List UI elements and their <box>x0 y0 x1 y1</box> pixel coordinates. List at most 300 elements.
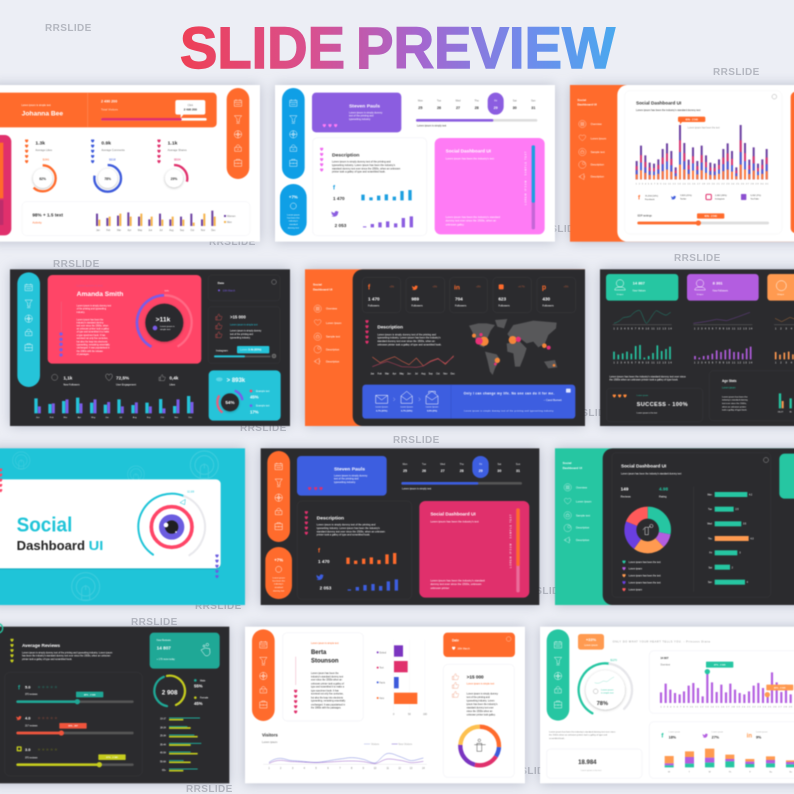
side menu: Dashboard UI <box>563 466 582 470</box>
horizontal bars: 4.3 <box>750 538 754 540</box>
rating row 3.0: 3.0 <box>25 747 31 752</box>
social stat cards: 1 470 <box>368 296 380 301</box>
profile card: typesetting industry <box>349 118 371 121</box>
instagram card: typesetting industry. <box>230 336 251 339</box>
growth pill: has been the <box>287 216 300 219</box>
horizontal bars: Mon <box>707 494 713 496</box>
header banner: 2 490 200 <box>184 107 197 111</box>
activity bar chart card: Dec <box>211 230 216 232</box>
profile card: survived not only five centuries, <box>311 693 344 696</box>
line chart: Nov <box>443 374 448 376</box>
slide 12: overview light <box>540 627 794 783</box>
bar charts: 1 2 3 4 <box>775 363 794 365</box>
growth badge <box>578 634 604 650</box>
stacked social card: Lorem ipsum <box>756 730 768 733</box>
calendar: 29 <box>494 106 498 110</box>
side menu <box>577 98 607 180</box>
calendar: Mon <box>418 100 423 103</box>
watermarks: RRSLIDE <box>53 259 100 270</box>
stat: shares: Average Shares <box>168 148 187 152</box>
likes card: typesetting industry. Lorem <box>467 700 495 703</box>
stat row: New Followers <box>63 383 80 386</box>
side menu: Overview <box>326 307 337 311</box>
success card: SUCCESS - 100% <box>637 402 688 408</box>
social stat cards: 430 <box>542 296 551 301</box>
visitors line chart: 7 <box>339 768 341 770</box>
description card: printer took a galley of type and scrambled book. <box>317 534 371 537</box>
profile card: Lorem ipsum is <box>160 325 175 328</box>
gauge: is simple text <box>601 692 614 695</box>
total card <box>547 749 642 778</box>
profile card: Stounson <box>311 658 339 664</box>
heading <box>10 639 112 663</box>
profile card: text of the printing and <box>334 478 359 481</box>
quote band: Only I can change my life. No one can do it for me. <box>464 391 554 395</box>
header banner: Johanna Bee <box>22 111 63 118</box>
slide 5: social map dark <box>305 269 585 426</box>
monthly bar chart: Mar <box>63 416 67 419</box>
horizontal bar chart: 0 <box>393 714 395 716</box>
slider: GDP rankings <box>637 214 653 217</box>
profile card: Amanda Smith <box>77 291 123 298</box>
stacked social card: T <box>689 772 691 774</box>
instagram card: Instagram <box>216 349 229 353</box>
likes card <box>443 664 514 777</box>
line charts: 1 2 3 4 5 6 7 8 9 10 11 12 13 14 <box>694 328 753 330</box>
profile card: ever since the 1500s when an <box>311 679 343 682</box>
visitors line chart: Visitors <box>371 743 380 746</box>
header banner: Lorem ipsum is simple text <box>21 104 51 107</box>
stacked social card: Su <box>789 772 793 774</box>
side menu <box>313 283 342 364</box>
chart card: 1 2 3 4 5 6 7 8 9 10 11 12 13 14 15 16 17 18 19 20 21 22 23 24 25 26 27 28 29 30 31 <box>636 183 769 185</box>
calendar: 31 <box>516 469 520 473</box>
heading: Lorem ipsum is simply dummy text of the printing and typesetting industry. Lorem ipsum <box>22 652 112 655</box>
horizontal bar chart: Auto <box>379 697 385 700</box>
description card: typesetting industry. Lorem ipsum has been the industry's <box>332 164 396 167</box>
donut legend: Lorem ipsum has been the text <box>629 575 661 578</box>
age stats card: 18-27 <box>778 412 784 414</box>
side menu: Description <box>576 526 590 530</box>
monthly bar chart: Apr <box>78 416 81 419</box>
stat: shares: 1.1k <box>168 140 178 146</box>
quote band: Lorem ipsum is simple dummy text of the printing and typesetting industry <box>464 410 554 413</box>
cyan stat card <box>209 370 281 421</box>
bar charts <box>613 345 794 365</box>
age stats card: Lorem ipsum <box>722 386 736 389</box>
stacked social card: 18% <box>669 736 677 740</box>
growth pill: dummy text <box>288 226 299 229</box>
rating row 4.0: 4.0 <box>25 716 31 721</box>
activity bar chart card: Oct <box>191 229 194 232</box>
side menu: Description <box>591 163 604 167</box>
chart card: Social Dashboard UI <box>636 100 681 105</box>
cyan stat card: > 893k <box>227 378 246 384</box>
age stats card: took a galley of type book. <box>722 409 747 412</box>
stat card purple <box>687 274 759 301</box>
social stat cards: +5% <box>389 287 394 289</box>
calendar: Fri <box>479 463 483 466</box>
age stats card: when an unknown printer <box>722 405 746 408</box>
side menu: Lorem Ipsum <box>576 500 592 504</box>
description card: Description <box>317 515 344 521</box>
profile card: text ever since the 1500s, when <box>77 324 109 327</box>
right green card <box>779 454 794 499</box>
visitors line chart: Visitors <box>262 732 278 737</box>
cyan stat card: 45% <box>250 395 259 400</box>
watermarks: RRSLIDE <box>209 237 256 248</box>
gender donut: 2 908 <box>162 689 178 696</box>
chart card: 7,823 (21%) <box>680 195 692 197</box>
watermarks: RRSLIDE <box>505 766 552 777</box>
line chart: Jul <box>415 374 418 376</box>
line chart: Feb <box>378 374 382 376</box>
description <box>365 320 442 346</box>
total card: 18.984 <box>578 760 597 766</box>
likes card: text of the printing and <box>467 696 490 699</box>
side menu: Lorem Ipsum <box>591 136 607 140</box>
horizontal bars <box>707 492 754 585</box>
overview bar chart card: 47% - 2 540 <box>714 664 726 667</box>
slide 11: Berta Stounson <box>245 627 525 783</box>
activity bar chart card: May <box>138 230 143 232</box>
slide 9: donut green dark <box>555 448 794 605</box>
social stat cards: 989 <box>411 296 420 301</box>
main card <box>612 453 771 597</box>
profile card: but also the leap into electronic <box>77 340 109 343</box>
description card: f <box>318 548 321 555</box>
age horizontal bars <box>160 718 201 772</box>
horizontal bar chart: Dotted <box>379 651 387 654</box>
horizontal bars: Sat <box>708 566 712 569</box>
side menu: Description <box>576 538 590 542</box>
right card edge <box>791 92 794 233</box>
profile card: text of the printing and <box>349 115 374 118</box>
rating row 3.0 <box>16 746 134 767</box>
donut <box>630 513 665 547</box>
age horizontal bars: 45-54 <box>160 753 167 755</box>
chart card: Facebook <box>645 199 655 201</box>
description card <box>313 138 427 236</box>
gender donut: 55% <box>194 684 203 689</box>
visitors line chart: 2 <box>280 768 282 770</box>
gender donut: 45% <box>194 701 203 706</box>
sidebar <box>227 88 249 179</box>
monthly bar chart: Jul <box>119 417 123 419</box>
quote band: – Carol Burnett <box>544 398 562 402</box>
rating row 5.0: 40% - 2 540 <box>84 693 96 696</box>
gender donut: Male <box>200 679 206 682</box>
horizontal bars: Wed <box>707 524 713 526</box>
stat row: Likes <box>169 383 176 386</box>
quote band: Lorem Ipsum <box>400 406 413 409</box>
header banner: 2 490 200 <box>101 100 117 104</box>
success card: Lorem ipsum <box>637 394 648 397</box>
profile card: typesetting, remaining essentially <box>311 700 346 703</box>
slide 6: visitors dark <box>600 269 794 426</box>
profile card <box>312 93 401 132</box>
pink feature card: Social Dashboard UI <box>446 148 491 153</box>
profile card: type and scrambled it to make a <box>311 686 345 689</box>
slide 1: Johanna Bee <box>0 85 260 242</box>
profile card: of the printing and typesetting <box>77 308 107 311</box>
description card: 1 470 <box>318 559 330 564</box>
quote band: Lorem Ipsum <box>375 406 388 409</box>
likes card: Lorem ipsum is simple text <box>467 683 495 686</box>
social stat cards: Followers <box>411 304 423 308</box>
sidebar <box>547 629 569 721</box>
watermarks: RRSLIDE <box>393 435 440 446</box>
description card: printer took a galley of type and scrambled book. <box>332 171 386 174</box>
body text: Lorem ipsum has been the industry's standard dummy text ever since <box>609 375 686 378</box>
line chart: Apr <box>393 373 396 376</box>
description: Description <box>377 325 403 330</box>
chart card: Instagram <box>715 197 725 200</box>
quote band: 9,9% (9%) <box>427 410 437 412</box>
crimson feature card: LOREM IPSUM - SAMPLE TEXT <box>510 514 513 568</box>
header banner: Total Visitors <box>101 108 118 112</box>
visitors line chart: 10 <box>374 768 377 770</box>
age horizontal bars: 18-24 <box>160 727 167 729</box>
gauge <box>569 654 642 726</box>
age stats card: text ever since the 1500s, <box>722 402 747 405</box>
stacked social card: f <box>661 732 664 739</box>
age stats card: Age Stats <box>722 379 737 383</box>
side menu: Lorem Ipsum <box>326 321 342 325</box>
profile card: industry. <box>77 311 85 314</box>
visitors line chart: 14 <box>422 768 425 770</box>
profile card <box>48 275 201 364</box>
rating row 5.0: 370 reviews <box>25 693 38 696</box>
visitors line chart: 6 <box>327 768 329 770</box>
visitors line chart: 3 <box>292 768 294 770</box>
profile card: simple text <box>160 328 171 331</box>
profile card: of passages. <box>77 354 90 356</box>
side menu: Sample text <box>326 335 340 339</box>
stat: likes: 1.3k <box>35 140 45 146</box>
description card: Lorem ipsum is simply dummy text of the printing and <box>332 161 391 164</box>
donut legend: Lorem ipsum has been the text <box>629 582 661 585</box>
visitors line chart: 11 <box>386 768 390 770</box>
activity bar chart card: Feb <box>106 230 111 232</box>
donut legend: Lorem ipsum has been the text <box>629 561 661 564</box>
eye gauge: 12,100 <box>187 491 195 493</box>
social stat cards: 704 <box>455 296 463 301</box>
slide 8: Steven Pauls dark <box>261 448 539 605</box>
chart card: YouTube <box>750 198 760 200</box>
age horizontal bars: 55-64 <box>160 761 167 763</box>
calendar: Mon <box>403 463 408 466</box>
white title card: Dashboard <box>17 539 85 553</box>
rating row 4.0: 30% - 297 <box>68 726 79 728</box>
stat: likes: $1941 <box>43 159 50 161</box>
main card: 4.98 <box>659 487 668 492</box>
stat: shares: $5334 <box>174 159 181 161</box>
description card: Lorem ipsum is simply dummy text of the printing and <box>317 524 376 527</box>
profile card: the 1960s with the release <box>77 350 104 353</box>
calendar: 30 <box>513 106 517 110</box>
age stats card: industry's standard dummy <box>722 399 749 402</box>
profile card: type specimen book. It has <box>311 689 340 692</box>
line chart: Jan <box>370 374 375 376</box>
chart card: 5,352 (7%) <box>750 195 761 197</box>
watermarks: RRSLIDE <box>535 224 582 235</box>
title: SLIDE <box>180 16 345 81</box>
left pink card <box>0 135 11 235</box>
activity bar chart card: Men <box>227 221 232 224</box>
horizontal bar chart: Text <box>379 667 384 670</box>
stat card purple: New Followers <box>713 289 729 292</box>
profile card: industry's standard dummy <box>77 321 104 324</box>
slide 2: Steven Pauls light <box>275 85 555 242</box>
rating row 5.0: f <box>18 685 21 692</box>
description: Lorem ipsum is simply dummy text of the printing and <box>377 334 437 337</box>
calendar: 28 <box>460 469 464 473</box>
growth badge: +33% <box>586 637 597 642</box>
profile card: unchanged. It was popularised in <box>77 347 110 350</box>
line chart <box>370 356 456 376</box>
description card: Description <box>332 152 359 158</box>
main card: Lorem ipsum has been the industry's standard dummy text <box>621 472 682 475</box>
stacked social card: M <box>668 772 670 774</box>
calendar: Wed <box>455 100 461 103</box>
growth pill <box>280 184 307 236</box>
profile card: Lorem ipsum is simply dummy <box>349 112 383 115</box>
activity bar chart card: Women <box>227 215 236 218</box>
sidebar <box>267 451 290 542</box>
horizontal bar chart: 50 <box>408 714 411 716</box>
stacked social card: F <box>749 772 751 774</box>
instagram card <box>208 307 280 363</box>
chart card <box>625 91 782 234</box>
crimson feature card: unknown printer <box>430 586 449 590</box>
rating row 5.0: ★★★★★ <box>37 684 58 689</box>
horizontal bars: 3.5 <box>743 524 747 526</box>
monthly bar chart: Aug <box>133 416 137 419</box>
pink feature card: unknown galley <box>446 223 465 227</box>
note text: Lorem ipsum has been the industry's standard dummy text ever since <box>549 731 616 734</box>
stacked social card: Th <box>729 772 732 774</box>
overview bar chart card: Overview <box>660 663 670 666</box>
date card <box>208 275 280 301</box>
quote text: ONLY DO WHAT YOUR HEART TELLS YOU. - Princess Diana <box>613 640 711 644</box>
likes card: since the 1500s when an <box>467 710 493 713</box>
age stats card <box>709 371 794 421</box>
side menu: Dashboard UI <box>313 287 333 291</box>
calendar: Sat <box>513 100 517 103</box>
date card <box>443 633 515 657</box>
total card: Lorem ipsum is the text <box>581 769 602 772</box>
calendar: Tue <box>437 100 442 103</box>
stacked social card: in <box>747 733 752 739</box>
quote band <box>362 385 575 419</box>
main card: Rating <box>659 495 667 499</box>
growth pill: dummy text <box>273 589 285 592</box>
pink feature card: Lorem ipsum has been the industry's text <box>446 156 494 160</box>
line chart: Dec <box>451 374 456 376</box>
new reviews card: 14 807 <box>157 646 171 651</box>
heading: has been the industry's standard dummy text ever since the 1500s, when an unknown <box>22 655 111 658</box>
social stat cards: Followers <box>455 304 467 308</box>
profile card: Berta <box>311 650 327 656</box>
watermarks: RRSLIDE <box>131 617 178 628</box>
calendar: 26 <box>422 469 426 473</box>
likes card: >15 000 <box>467 674 484 679</box>
calendar: Fri <box>494 100 498 103</box>
activity bar chart card: 98% + 1.5 text <box>32 213 63 218</box>
profile card: typesetting, remaining essentially <box>77 343 111 346</box>
growth pill: industry's <box>289 220 298 223</box>
line chart: Sep <box>429 374 433 376</box>
monthly bar chart: Nov <box>174 417 179 419</box>
horizontal bars: 4 <box>747 582 749 584</box>
social legend: f <box>638 194 641 201</box>
visitors line chart: 8 <box>351 768 353 770</box>
instagram card: Lorem ipsum is simple text <box>230 324 258 327</box>
profile card: Steven Pauls <box>349 103 380 109</box>
visitors line chart: 13 <box>410 768 413 770</box>
social stat cards: Followers <box>542 304 554 308</box>
line chart: Jun <box>407 374 412 376</box>
stat row: User Engagement <box>116 383 136 386</box>
likes card: unknown printer took galley. <box>467 713 496 716</box>
profile card: an unknown printer took a galley <box>77 328 110 331</box>
growth pill: has been the <box>272 579 286 582</box>
calendar: 30 <box>497 469 501 473</box>
age horizontal bars: 13-17 <box>160 719 167 721</box>
description: typesetting industry. Lorem ipsum has been the industry's <box>377 337 441 340</box>
stacked social card: Lorem ipsum <box>712 730 723 733</box>
monthly bar chart: Jan <box>36 417 40 419</box>
description card: 1 470 <box>333 196 345 201</box>
watermarks: RRSLIDE <box>713 67 760 78</box>
cyan stat card: Example text <box>256 405 270 408</box>
chart card: 40% - 2 540 <box>704 215 718 218</box>
age stats card: 35 <box>789 412 793 414</box>
monthly bar chart: May <box>91 417 96 419</box>
visitors line chart: 1 <box>268 768 270 770</box>
monthly bar chart: Jun <box>105 417 110 419</box>
social stat cards: Followers <box>498 304 510 308</box>
stat card green: New Visitors <box>633 289 646 292</box>
horizontal bars: Tue <box>708 509 713 511</box>
slide 7: cover <box>0 448 245 605</box>
calendar: Sun <box>516 463 521 466</box>
line chart: Oct <box>436 373 440 376</box>
overview bar chart card <box>649 651 794 713</box>
stat card orange: Unique <box>777 294 785 296</box>
stat: likes: 62% <box>39 177 46 181</box>
stacked bar chart <box>637 125 767 179</box>
horizontal bars: 2.5 <box>735 509 739 511</box>
gauge <box>137 295 192 350</box>
side menu: Social <box>577 98 586 102</box>
profile card: 50% <box>165 290 169 292</box>
activity bar chart card: Jun <box>148 230 153 232</box>
stacked social card: 9% <box>756 736 762 740</box>
activity bar chart card: Sep <box>180 230 185 232</box>
visitors line chart: Lorem ipsum <box>262 740 278 744</box>
quote band: 6,7% (52%) <box>401 410 413 412</box>
pink feature card: LOREM IPSUM - SAMPLE TEXT <box>525 151 528 205</box>
profile card: a type specimen book. It has <box>77 334 106 337</box>
activity bar chart card: Jan <box>96 230 101 232</box>
crimson feature card <box>419 501 529 598</box>
bar charts: 1 2 3 4 5 6 7 8 9 10 11 12 13 14 <box>613 363 672 365</box>
heading: printer took a galley of type and scrambled book. <box>22 658 73 661</box>
social stat cards: +4.7% <box>518 287 525 289</box>
visitors line chart: 5 <box>315 768 317 770</box>
